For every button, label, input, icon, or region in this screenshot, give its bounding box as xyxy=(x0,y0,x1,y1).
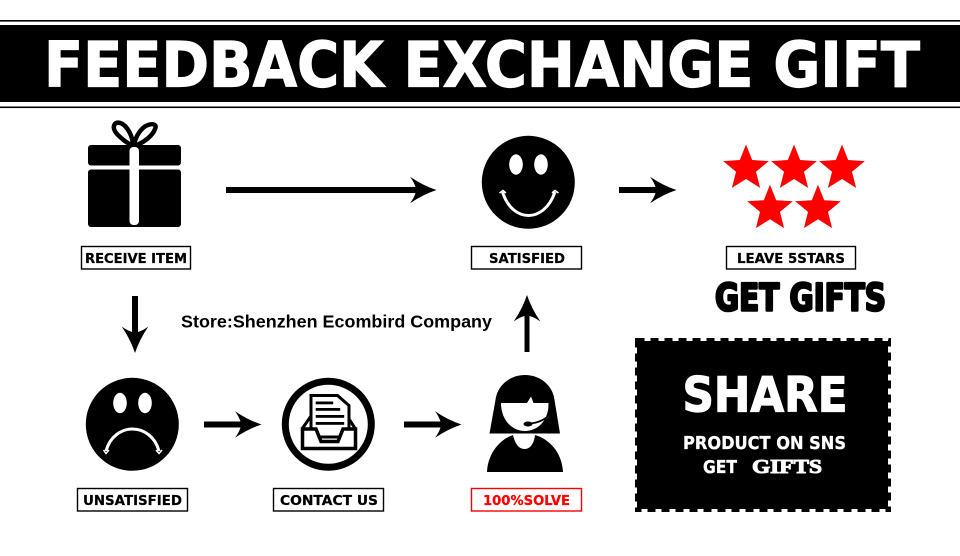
icon: contact inbox xyxy=(285,381,371,467)
heading: get gifts: GET GIFTS xyxy=(715,276,886,320)
icon: gift box xyxy=(88,123,181,227)
arrow: unsatisfied to contact xyxy=(204,411,262,438)
arrow: receive to unsatisfied xyxy=(122,296,148,353)
label: contact us xyxy=(274,488,384,511)
share text: get: GET xyxy=(703,458,737,478)
label: 100% solve: 100%SOLVE xyxy=(483,493,570,509)
label: receive item: RECEIVE ITEM xyxy=(85,251,187,267)
share text: gifts: GIFTS xyxy=(752,456,822,478)
store name: Store:Shenzhen Ecombird Company xyxy=(181,312,492,332)
arrow: receive to satisfied xyxy=(226,177,436,203)
label: leave 5 stars xyxy=(726,246,856,269)
label: 100% solve xyxy=(472,488,582,511)
icon: five red stars xyxy=(723,144,865,228)
label: receive item xyxy=(82,246,190,269)
icon: satisfied face xyxy=(482,136,575,229)
label: contact us: CONTACT US xyxy=(280,493,378,509)
panel: share xyxy=(636,340,890,510)
share text: PRODUCT ON SNS xyxy=(683,434,846,454)
icon: support agent with headset xyxy=(487,375,563,472)
label: unsatisfied xyxy=(78,488,188,511)
icon: unsatisfied face xyxy=(86,378,179,471)
arrow: contact to support xyxy=(404,411,462,438)
label: leave 5 stars: LEAVE 5STARS xyxy=(737,251,845,267)
label: unsatisfied: UNSATISFIED xyxy=(83,493,182,509)
label: satisfied: SATISFIED xyxy=(489,251,565,267)
arrow: satisfied to stars xyxy=(619,177,676,203)
arrow: support to satisfied xyxy=(514,295,540,352)
label: satisfied xyxy=(472,246,582,269)
share heading: SHARE xyxy=(682,368,848,424)
